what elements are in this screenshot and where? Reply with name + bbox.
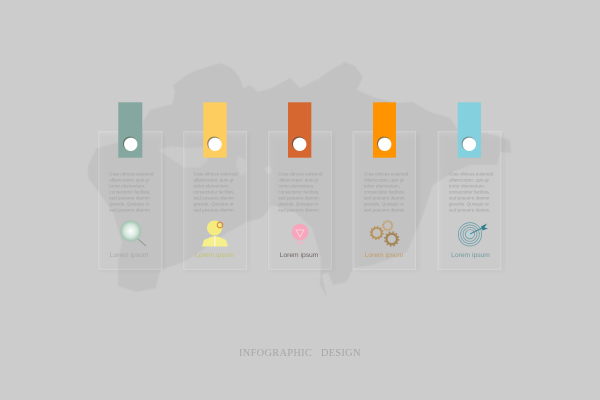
- body text: consectetur facilisis,: [109, 189, 150, 194]
- tab: teal: [118, 102, 142, 158]
- card 4: gears: [353, 102, 416, 269]
- tab: orange red: [288, 102, 311, 158]
- body text: tortor elementum,: [364, 183, 400, 188]
- tab: yellow: [203, 102, 227, 158]
- body text: tortor elementum,: [109, 183, 145, 188]
- body text: sed posuere diamm.: [364, 207, 406, 212]
- body text: gravida. Quisque or: [364, 201, 405, 206]
- card 5: target: [438, 102, 501, 269]
- body text: gravida. Quisque or: [194, 201, 234, 206]
- icon: target with arrow: [458, 223, 488, 246]
- label: Lorem ipsum: [451, 252, 490, 259]
- body text: sed posuere diamm.: [278, 207, 320, 212]
- body text: consectetur facilisis,: [364, 189, 405, 194]
- world map silhouette: [88, 62, 511, 298]
- body text: ullamcorper, quis gr: [194, 177, 234, 182]
- body text: Cras ultrices euismod: [194, 171, 238, 176]
- label: Lorem ipsum: [365, 252, 404, 259]
- body text: consectetur facilisis,: [278, 189, 319, 194]
- icon: magnifying glass: [120, 220, 146, 246]
- body text: gravida. Quisque or: [278, 201, 319, 206]
- card 2: person: [184, 102, 247, 269]
- hole: [207, 137, 222, 151]
- body text: Cras ultrices euismod: [449, 171, 494, 176]
- body text: gravida. Quisque or: [109, 201, 150, 206]
- body text: sed posuere diamm: [278, 195, 319, 200]
- body text: ullamcorper, quis gr: [109, 177, 150, 182]
- label: Lorem ipsum: [110, 252, 149, 259]
- body text: sed posuere diamm.: [449, 207, 491, 212]
- body text: sed posuere diamm: [194, 195, 234, 200]
- body text: ullamcorper, quis gr: [449, 177, 490, 182]
- body text: tortor elementum,: [194, 183, 230, 188]
- body text: Cras ultrices euismod: [278, 171, 323, 176]
- hole: [292, 137, 306, 151]
- body text: sed posuere diamm: [364, 195, 405, 200]
- body text: sed posuere diamm.: [109, 207, 151, 212]
- card shadows: [99, 134, 504, 271]
- label: Lorem ipsum: [280, 252, 319, 259]
- hole: [462, 137, 476, 151]
- card 3: idea: [269, 102, 331, 269]
- body text: ullamcorper, quis gr: [278, 177, 319, 182]
- card 1: research: [99, 102, 162, 269]
- icon: light bulb: [292, 224, 308, 244]
- body text: consectetur facilisis,: [449, 189, 490, 194]
- body text: sed posuere diamm: [109, 195, 150, 200]
- body text: Cras ultrices euismod: [109, 171, 154, 176]
- body text: ullamcorper, quis gr: [364, 177, 405, 182]
- body text: tortor elementum,: [278, 183, 314, 188]
- body text: gravida. Quisque or: [449, 201, 490, 206]
- icon: person with gear: [202, 220, 228, 246]
- tab: orange: [373, 102, 396, 158]
- tab: sky blue: [458, 102, 481, 158]
- hole: [123, 137, 137, 151]
- body text: sed posuere diamm.: [194, 207, 235, 212]
- body text: Cras ultrices euismod: [364, 171, 409, 176]
- body text: sed posuere diamm: [449, 195, 490, 200]
- body text: tortor elementum,: [449, 183, 485, 188]
- label: Lorem ipsum: [195, 252, 234, 259]
- hole: [377, 137, 391, 151]
- body text: consectetur facilisis,: [194, 189, 235, 194]
- footer title: INFOGRAPHIC DESIGN: [239, 348, 361, 359]
- icon: gears: [370, 220, 399, 246]
